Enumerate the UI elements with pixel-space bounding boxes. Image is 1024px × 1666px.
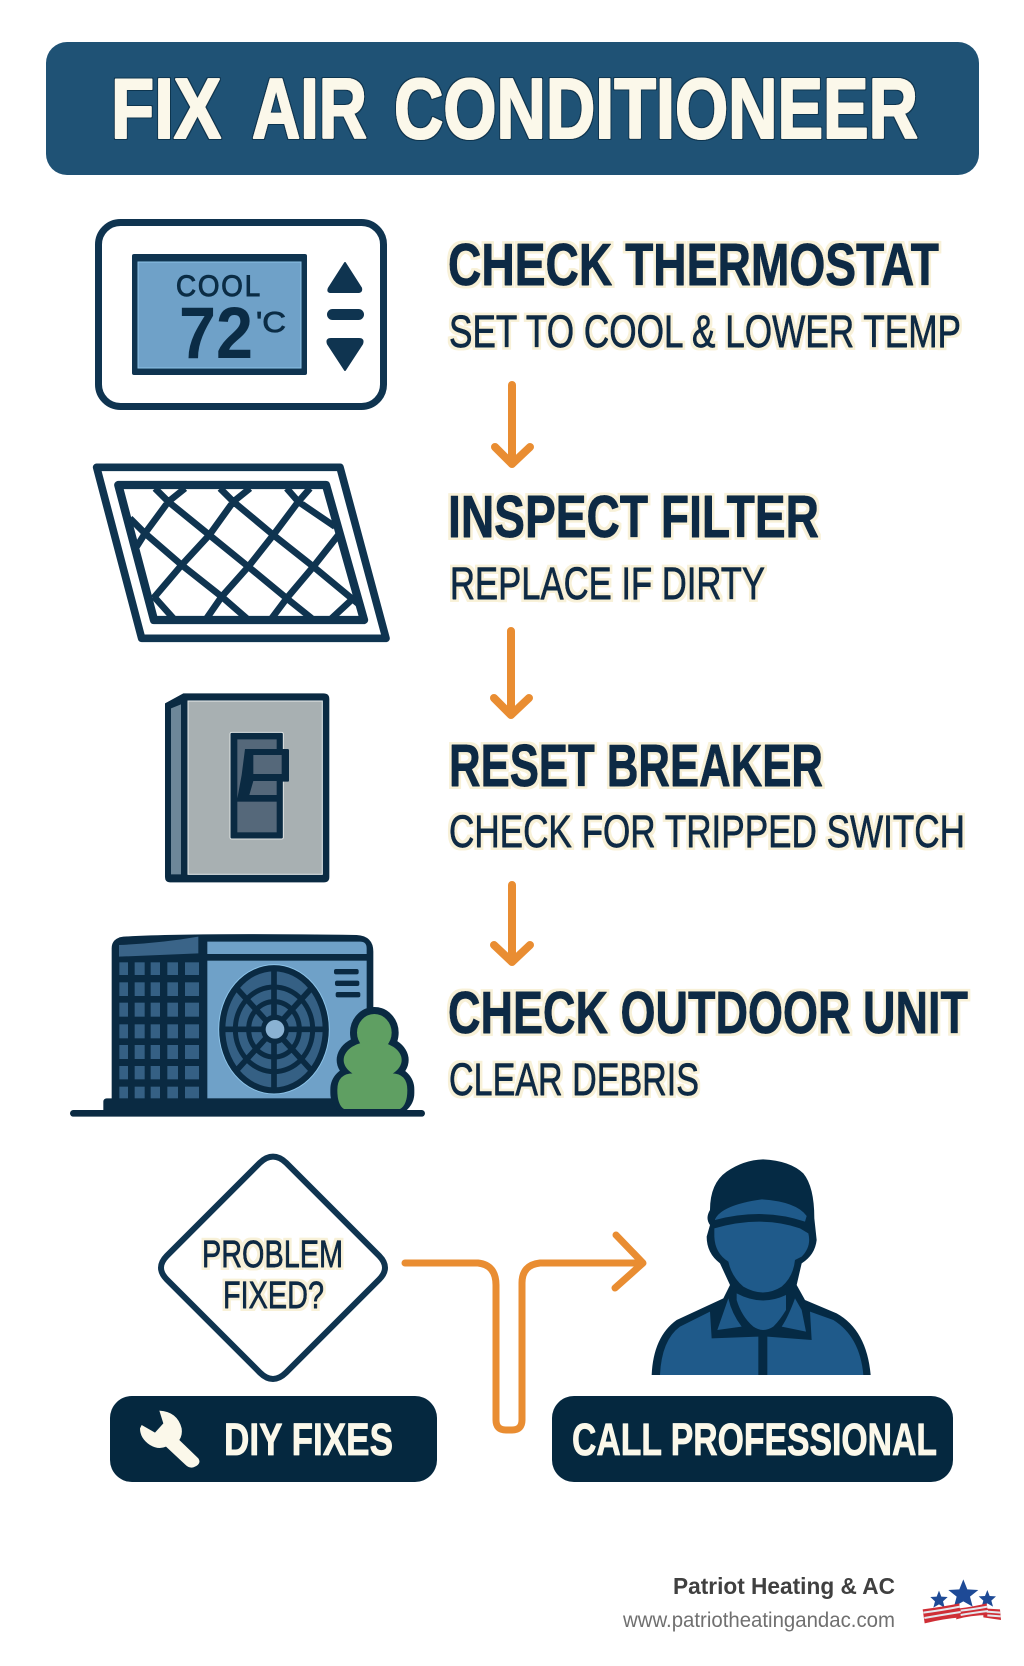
thermostat up button <box>328 263 361 292</box>
DIY fixes label: DIY FIXES <box>224 1414 393 1465</box>
unit fan <box>219 965 329 1094</box>
arrow 3 <box>494 885 530 962</box>
step 3 heading: RESET BREAKER <box>449 733 823 799</box>
step 2 detail: REPLACE IF DIRTY <box>450 558 765 609</box>
icon: outdoor AC unit <box>70 934 425 1117</box>
thermostat mode label: COOL <box>176 270 262 303</box>
footer website: www.patriotheatingandac.com <box>622 1609 895 1632</box>
icon: technician <box>652 1159 871 1375</box>
icon: thermostat <box>98 222 384 406</box>
breaker switch <box>230 732 289 839</box>
unit vents <box>334 969 360 997</box>
step 2 text <box>448 484 819 609</box>
title: AIR <box>252 62 367 157</box>
step 3 text <box>449 733 965 857</box>
icon: shrub <box>337 1014 407 1109</box>
thermostat unit: 'C <box>256 307 286 339</box>
arrow 1 <box>495 385 530 464</box>
step 4 detail: CLEAR DEBRIS <box>449 1054 699 1105</box>
unit front panel <box>207 942 367 954</box>
call professional button <box>552 1396 953 1482</box>
thermostat down button <box>327 339 363 370</box>
decision diamond <box>161 1157 385 1379</box>
thermostat temperature: 72 <box>179 293 253 374</box>
icon: wrench <box>140 1411 199 1468</box>
icon: patriot logo <box>923 1579 1001 1623</box>
thermostat middle button <box>327 309 364 320</box>
title: FIX <box>111 62 221 157</box>
step 1 text <box>448 232 961 357</box>
unit side grille <box>119 937 199 1098</box>
step 4 text <box>448 980 968 1105</box>
footer brand name: Patriot Heating & AC <box>673 1573 895 1599</box>
step 2 heading: INSPECT FILTER <box>448 484 819 550</box>
arrow 2 <box>494 631 529 715</box>
icon: circuit breaker <box>165 693 329 882</box>
decision text line 2: FIXED? <box>223 1275 324 1317</box>
connector arrow <box>405 1235 643 1430</box>
decision text line 1: PROBLEM <box>202 1234 343 1276</box>
icon: air filter <box>97 467 386 638</box>
title banner <box>46 42 979 175</box>
DIY fixes button <box>110 1396 437 1482</box>
